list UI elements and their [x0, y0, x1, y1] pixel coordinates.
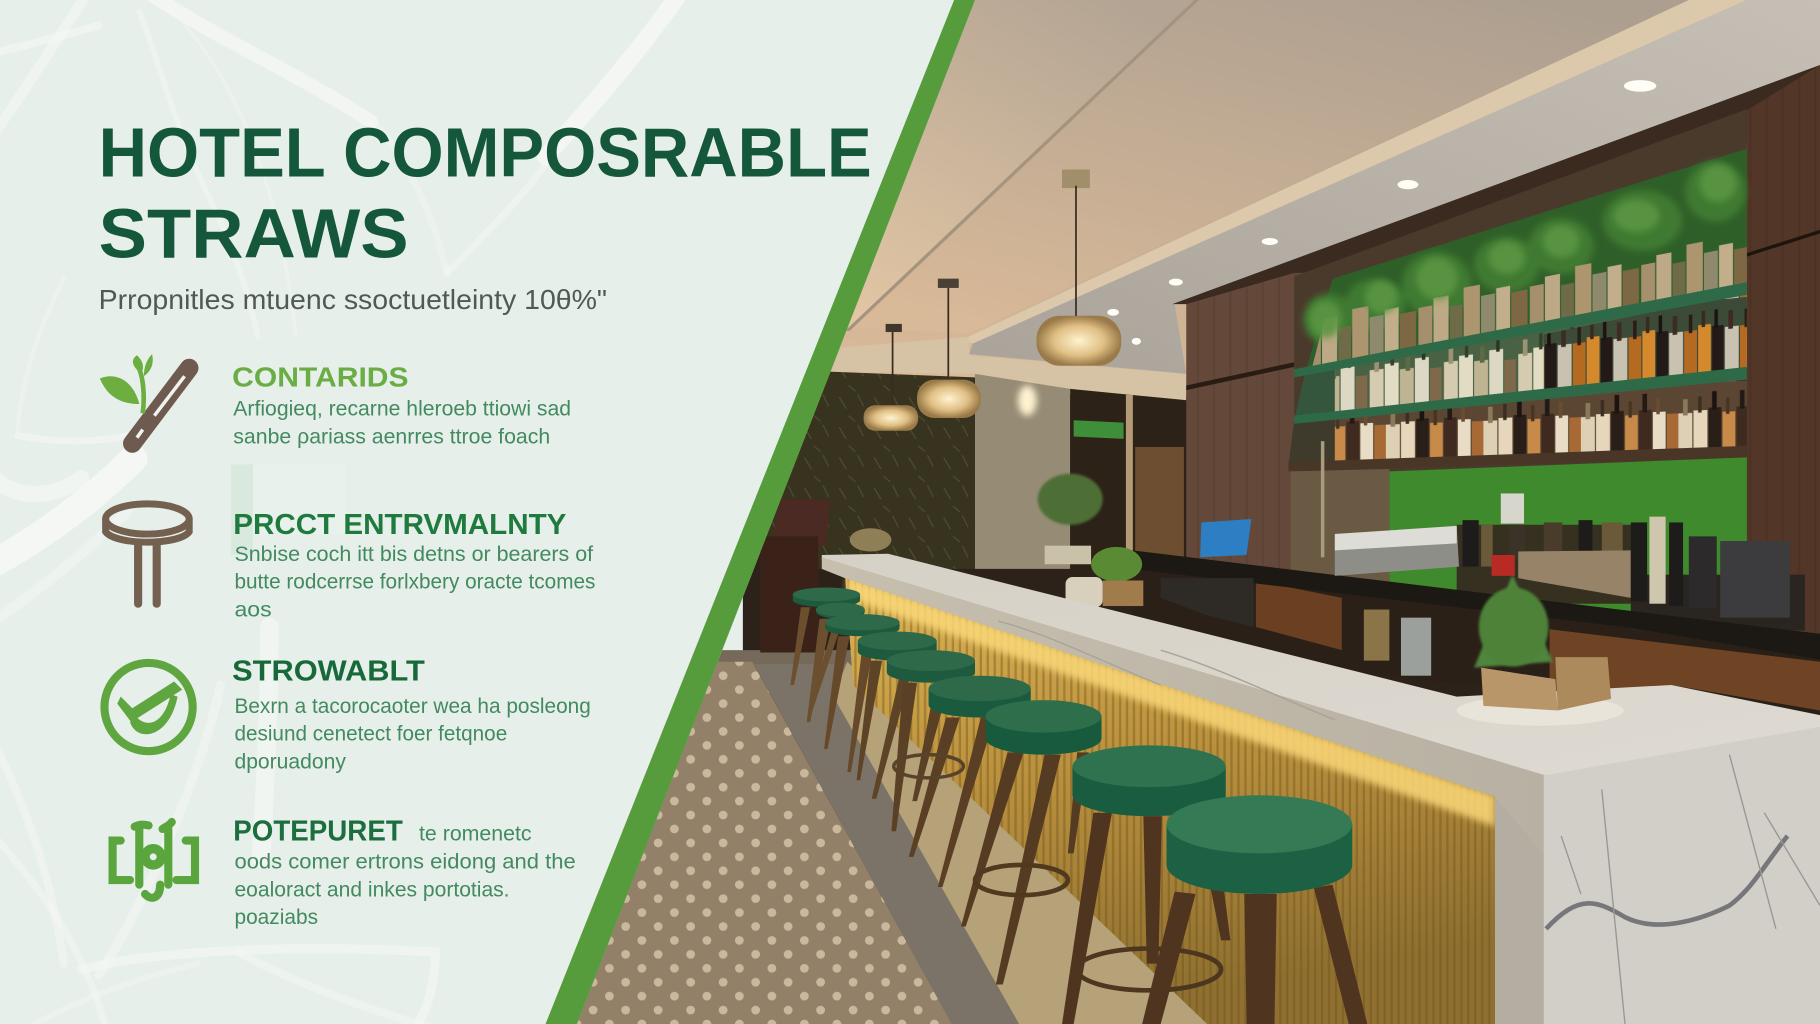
backdrop behind the counters [742, 349, 1747, 697]
bar photograph panel [557, 0, 1820, 1024]
decorative leaf line pattern [0, 0, 679, 1024]
icon: bracketed sprout [113, 822, 195, 898]
title: STRAWS [99, 195, 409, 273]
recessed ceiling lights [1107, 80, 1656, 345]
title [99, 113, 872, 273]
plant pot centerpiece [1457, 575, 1624, 726]
ceiling [812, 0, 1820, 404]
feature: potepuret [113, 816, 576, 929]
description: strowablt: desiund cenetect foer fetqnoe [234, 722, 507, 746]
back bar cabinetry [1172, 65, 1820, 697]
description: potepuret: te romenetc [419, 822, 532, 846]
heading: strowablt: STROWABLT [232, 655, 425, 687]
heading: prcct entrvmalnty: PRCCT ENTRVMALNTY [233, 509, 566, 541]
marble bar counter [822, 554, 1820, 1024]
gold slatted bar front [845, 575, 1495, 1024]
description: strowablt: Bexrn a tacorocaoter wea ha posleong [234, 694, 591, 718]
description: strowablt [234, 694, 591, 774]
subtitle: Prropnitles mtuenc ssoctuetleinty 10θ%" [99, 284, 607, 315]
description: contarids: sanbe ρariass aenrres ttroe foach [233, 424, 550, 449]
back wall, marble and stone column [766, 369, 1190, 569]
back counter with equipment [1066, 517, 1820, 720]
icon: straw with leaves [100, 354, 189, 444]
left panel background [0, 0, 686, 1024]
row of green bar stools [790, 587, 1367, 1024]
description: contarids: Arfiogieq, recarne hleroeb ttiowi sad [233, 397, 571, 421]
description: potepuret: poaziabs [234, 905, 318, 929]
heading: contarids: CONTARIDS [232, 362, 409, 393]
feature: strowablt [104, 655, 591, 774]
description: prcct entrvmalnty [234, 542, 595, 621]
description: prcct entrvmalnty: aos [234, 597, 272, 621]
floor and carpet [557, 536, 1230, 1024]
green diagonal stripe [546, 0, 975, 1024]
icon: check in circle [104, 663, 193, 751]
title: HOTEL COMPOSRABLE [99, 113, 872, 191]
top shelf bottles [1312, 241, 1747, 366]
icon: stool [106, 504, 189, 604]
pendant lamps [864, 170, 1121, 431]
description: potepuret [234, 822, 576, 929]
description: prcct entrvmalnty: butte rodcerrse forlxbery oracte tcomes [234, 570, 595, 594]
heading: potepuret: POTEPURET [233, 816, 403, 848]
description: potepuret: eoaloract and inkes portotias. [234, 877, 510, 901]
description: prcct entrvmalnty: Snbise coch itt bis detns or bearers of [234, 542, 593, 566]
shelves and bottles [1288, 282, 1747, 611]
description: strowablt: dporuadony [234, 750, 346, 774]
feature: prcct entrvmalnty [106, 504, 595, 621]
feature: contarids [100, 354, 571, 449]
description: contarids [233, 397, 571, 449]
description: potepuret: oods comer ertrons eidong and the [234, 849, 576, 873]
green shelf recess with plants [1303, 149, 1747, 372]
